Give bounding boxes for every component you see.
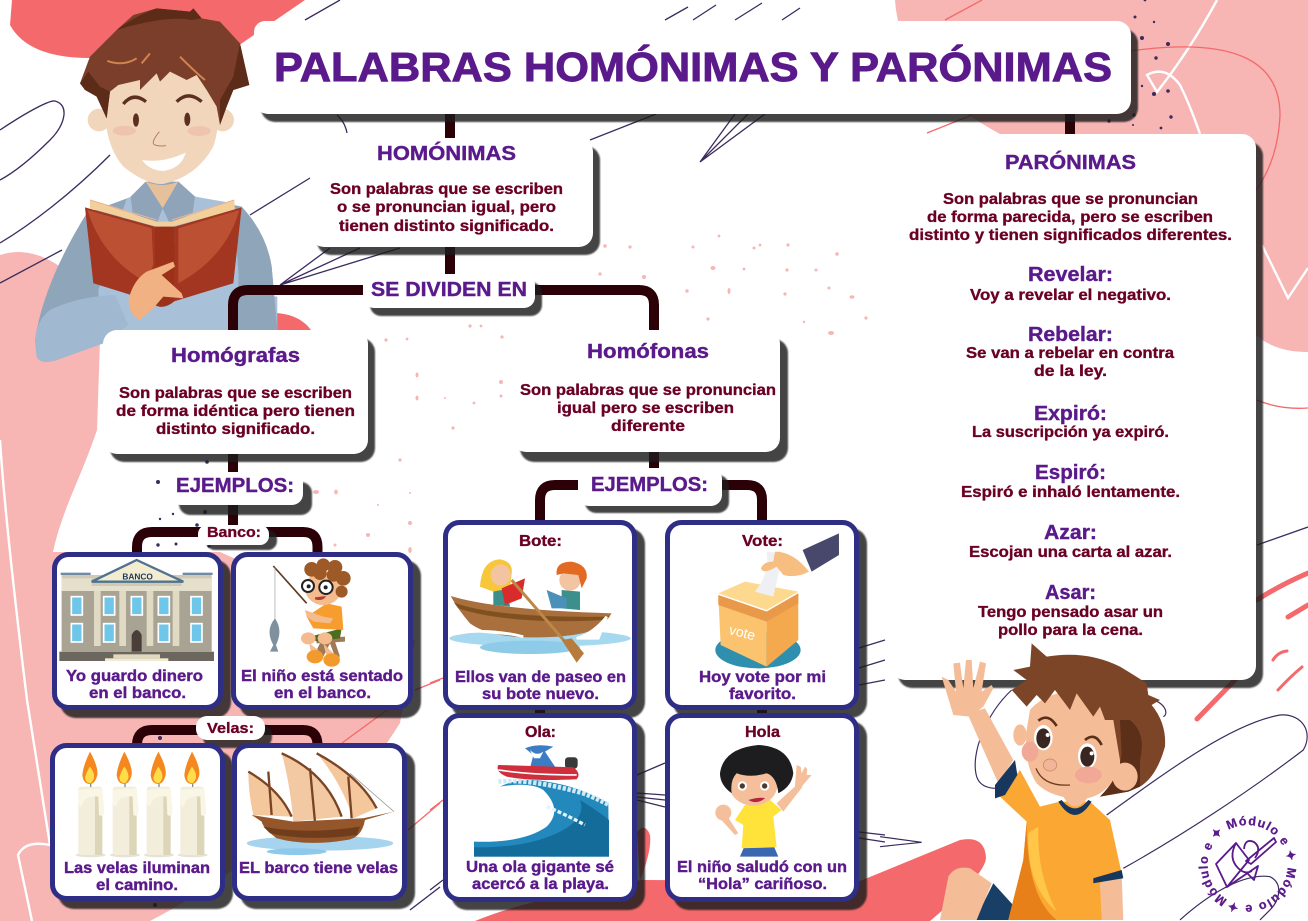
icon: shark on boat over a wave xyxy=(474,745,609,857)
title panel xyxy=(254,21,1138,122)
definition: homógrafas: de forma idéntica pero tienen xyxy=(116,403,355,420)
panel: homófonas xyxy=(512,330,788,462)
caption xyxy=(455,669,626,703)
definition: homónimas: Son palabras que se escriben xyxy=(330,181,563,198)
card: sailing ship xyxy=(234,746,415,909)
label: banco xyxy=(198,525,277,550)
icon: fishing boy xyxy=(270,558,351,667)
example: espiró: Espiró e inhaló lentamente. xyxy=(961,484,1180,501)
definition: homófonas: igual pero se escriben xyxy=(557,400,734,417)
label: banco: Banco: xyxy=(207,525,261,541)
card: rowing boat xyxy=(446,522,645,718)
word: vote: Vote: xyxy=(742,533,783,550)
example: revelar: Revelar: xyxy=(1028,264,1113,286)
card: banco building xyxy=(54,554,231,718)
caption: favorito. xyxy=(729,686,796,703)
icon: four candles xyxy=(76,752,208,857)
example: rebelar: Rebelar: xyxy=(1028,324,1113,346)
panel: parónimas xyxy=(891,134,1263,688)
definition: homógrafas: distinto significado. xyxy=(156,421,315,438)
icon: bank: BANCO xyxy=(122,572,153,582)
illustration: boy reading a book xyxy=(35,8,277,362)
caption: el camino. xyxy=(96,877,178,894)
definition: homónimas xyxy=(330,181,563,235)
label: se dividen en xyxy=(363,274,542,316)
caption xyxy=(66,668,203,702)
label: ejemplos homógrafas xyxy=(170,472,312,515)
label: velas xyxy=(196,716,272,748)
definition: homófonas: Son palabras que se pronuncian xyxy=(520,382,776,399)
illustration: waving boy xyxy=(940,643,1165,920)
title: PALABRAS HOMÓNIMAS Y PARÓNIMAS xyxy=(274,44,1112,90)
icon: bank xyxy=(59,560,214,661)
definition: homógrafas xyxy=(116,385,355,438)
definition: homónimas: o se pronuncian igual, pero xyxy=(337,199,556,216)
example: asar: Asar: xyxy=(1045,582,1096,604)
example: azar xyxy=(969,522,1172,561)
card: wave xyxy=(446,716,645,910)
word: ola: Ola: xyxy=(525,724,556,741)
definition: homógrafas: Son palabras que se escriben xyxy=(119,385,352,402)
caption: Hoy vote por mi xyxy=(699,669,826,686)
word: hola: Hola xyxy=(745,724,780,741)
icon: ship xyxy=(247,753,394,855)
heading: parónimas: PARÓNIMAS xyxy=(1005,150,1136,174)
panel: homónimas xyxy=(310,138,600,255)
caption: Una ola gigante sé xyxy=(466,859,614,876)
icon: ballot box xyxy=(715,533,839,668)
caption: Las velas iluminan xyxy=(64,860,210,877)
word: bote: Bote: xyxy=(519,533,562,550)
caption: El niño está sentado xyxy=(241,668,403,685)
definition: parónimas: distinto y tienen significados diferentes. xyxy=(909,227,1232,244)
caption: en el banco. xyxy=(274,685,371,702)
caption xyxy=(677,859,847,893)
example: revelar xyxy=(970,264,1171,304)
module seal: Módulo e ✦ Módulo e ✦ Módulo e ✦ xyxy=(1198,816,1296,912)
connector lines xyxy=(137,110,1070,748)
heading: homófonas: Homófonas xyxy=(587,341,709,363)
card: ballot box xyxy=(668,522,867,718)
caption: Ellos van de paseo en xyxy=(455,669,626,686)
example: expiró: La suscripción ya expiró. xyxy=(972,424,1169,441)
caption xyxy=(699,669,826,703)
card: boy greeting xyxy=(668,716,867,910)
example: rebelar: de la ley. xyxy=(1034,363,1107,380)
example: rebelar xyxy=(966,324,1174,380)
label: ejemplos homófonas xyxy=(578,468,729,513)
caption: acercó a la playa. xyxy=(472,876,609,893)
example: expiró: Expiró: xyxy=(1034,403,1107,425)
card: boy fishing on a bench xyxy=(234,554,421,718)
label: velas: Velas: xyxy=(207,720,254,737)
caption: su bote nuevo. xyxy=(482,686,599,703)
heading: homógrafas: Homógrafas xyxy=(171,345,300,367)
icon: ballot box: vote xyxy=(728,621,757,643)
example: rebelar: Se van a rebelar en contra xyxy=(966,345,1174,362)
definition: homófonas: diferente xyxy=(611,418,685,435)
heading: homónimas: HOMÓNIMAS xyxy=(377,141,516,165)
definition: parónimas: Son palabras que se pronuncian xyxy=(943,191,1198,208)
definition: parónimas xyxy=(909,191,1232,244)
caption: “Hola” cariñoso. xyxy=(698,876,827,893)
label: ejemplos homógrafas: EJEMPLOS: xyxy=(176,475,294,497)
definition: parónimas: de forma parecida, pero se escriben xyxy=(927,209,1213,226)
example: asar: Tengo pensado asar un xyxy=(978,604,1163,621)
card: candles xyxy=(52,746,233,909)
panel: homógrafas xyxy=(103,330,375,462)
icon: waving boy in yellow shirt xyxy=(715,745,812,857)
caption: El niño saludó con un xyxy=(677,859,847,876)
definition: homófonas xyxy=(520,382,776,435)
example: asar xyxy=(978,582,1163,639)
caption: en el banco. xyxy=(89,685,186,702)
example: espiró: Espiró: xyxy=(1035,462,1106,484)
example: expiró xyxy=(972,403,1169,441)
label: ejemplos homófonas: EJEMPLOS: xyxy=(591,474,708,496)
caption: Yo guardo dinero xyxy=(66,668,203,685)
caption xyxy=(241,668,403,702)
icon: children in a boat xyxy=(449,559,631,663)
example: asar: pollo para la cena. xyxy=(998,622,1143,639)
example: azar: Azar: xyxy=(1044,522,1097,544)
example: espiró xyxy=(961,462,1180,501)
caption: EL barco tiene velas xyxy=(239,860,398,877)
caption xyxy=(64,860,210,894)
example: azar: Escojan una carta al azar. xyxy=(969,544,1172,561)
label: se dividen en: SE DIVIDEN EN xyxy=(371,279,527,301)
caption xyxy=(466,859,614,893)
example: revelar: Voy a revelar el negativo. xyxy=(970,287,1171,304)
definition: homónimas: tienen distinto significado. xyxy=(339,218,554,235)
